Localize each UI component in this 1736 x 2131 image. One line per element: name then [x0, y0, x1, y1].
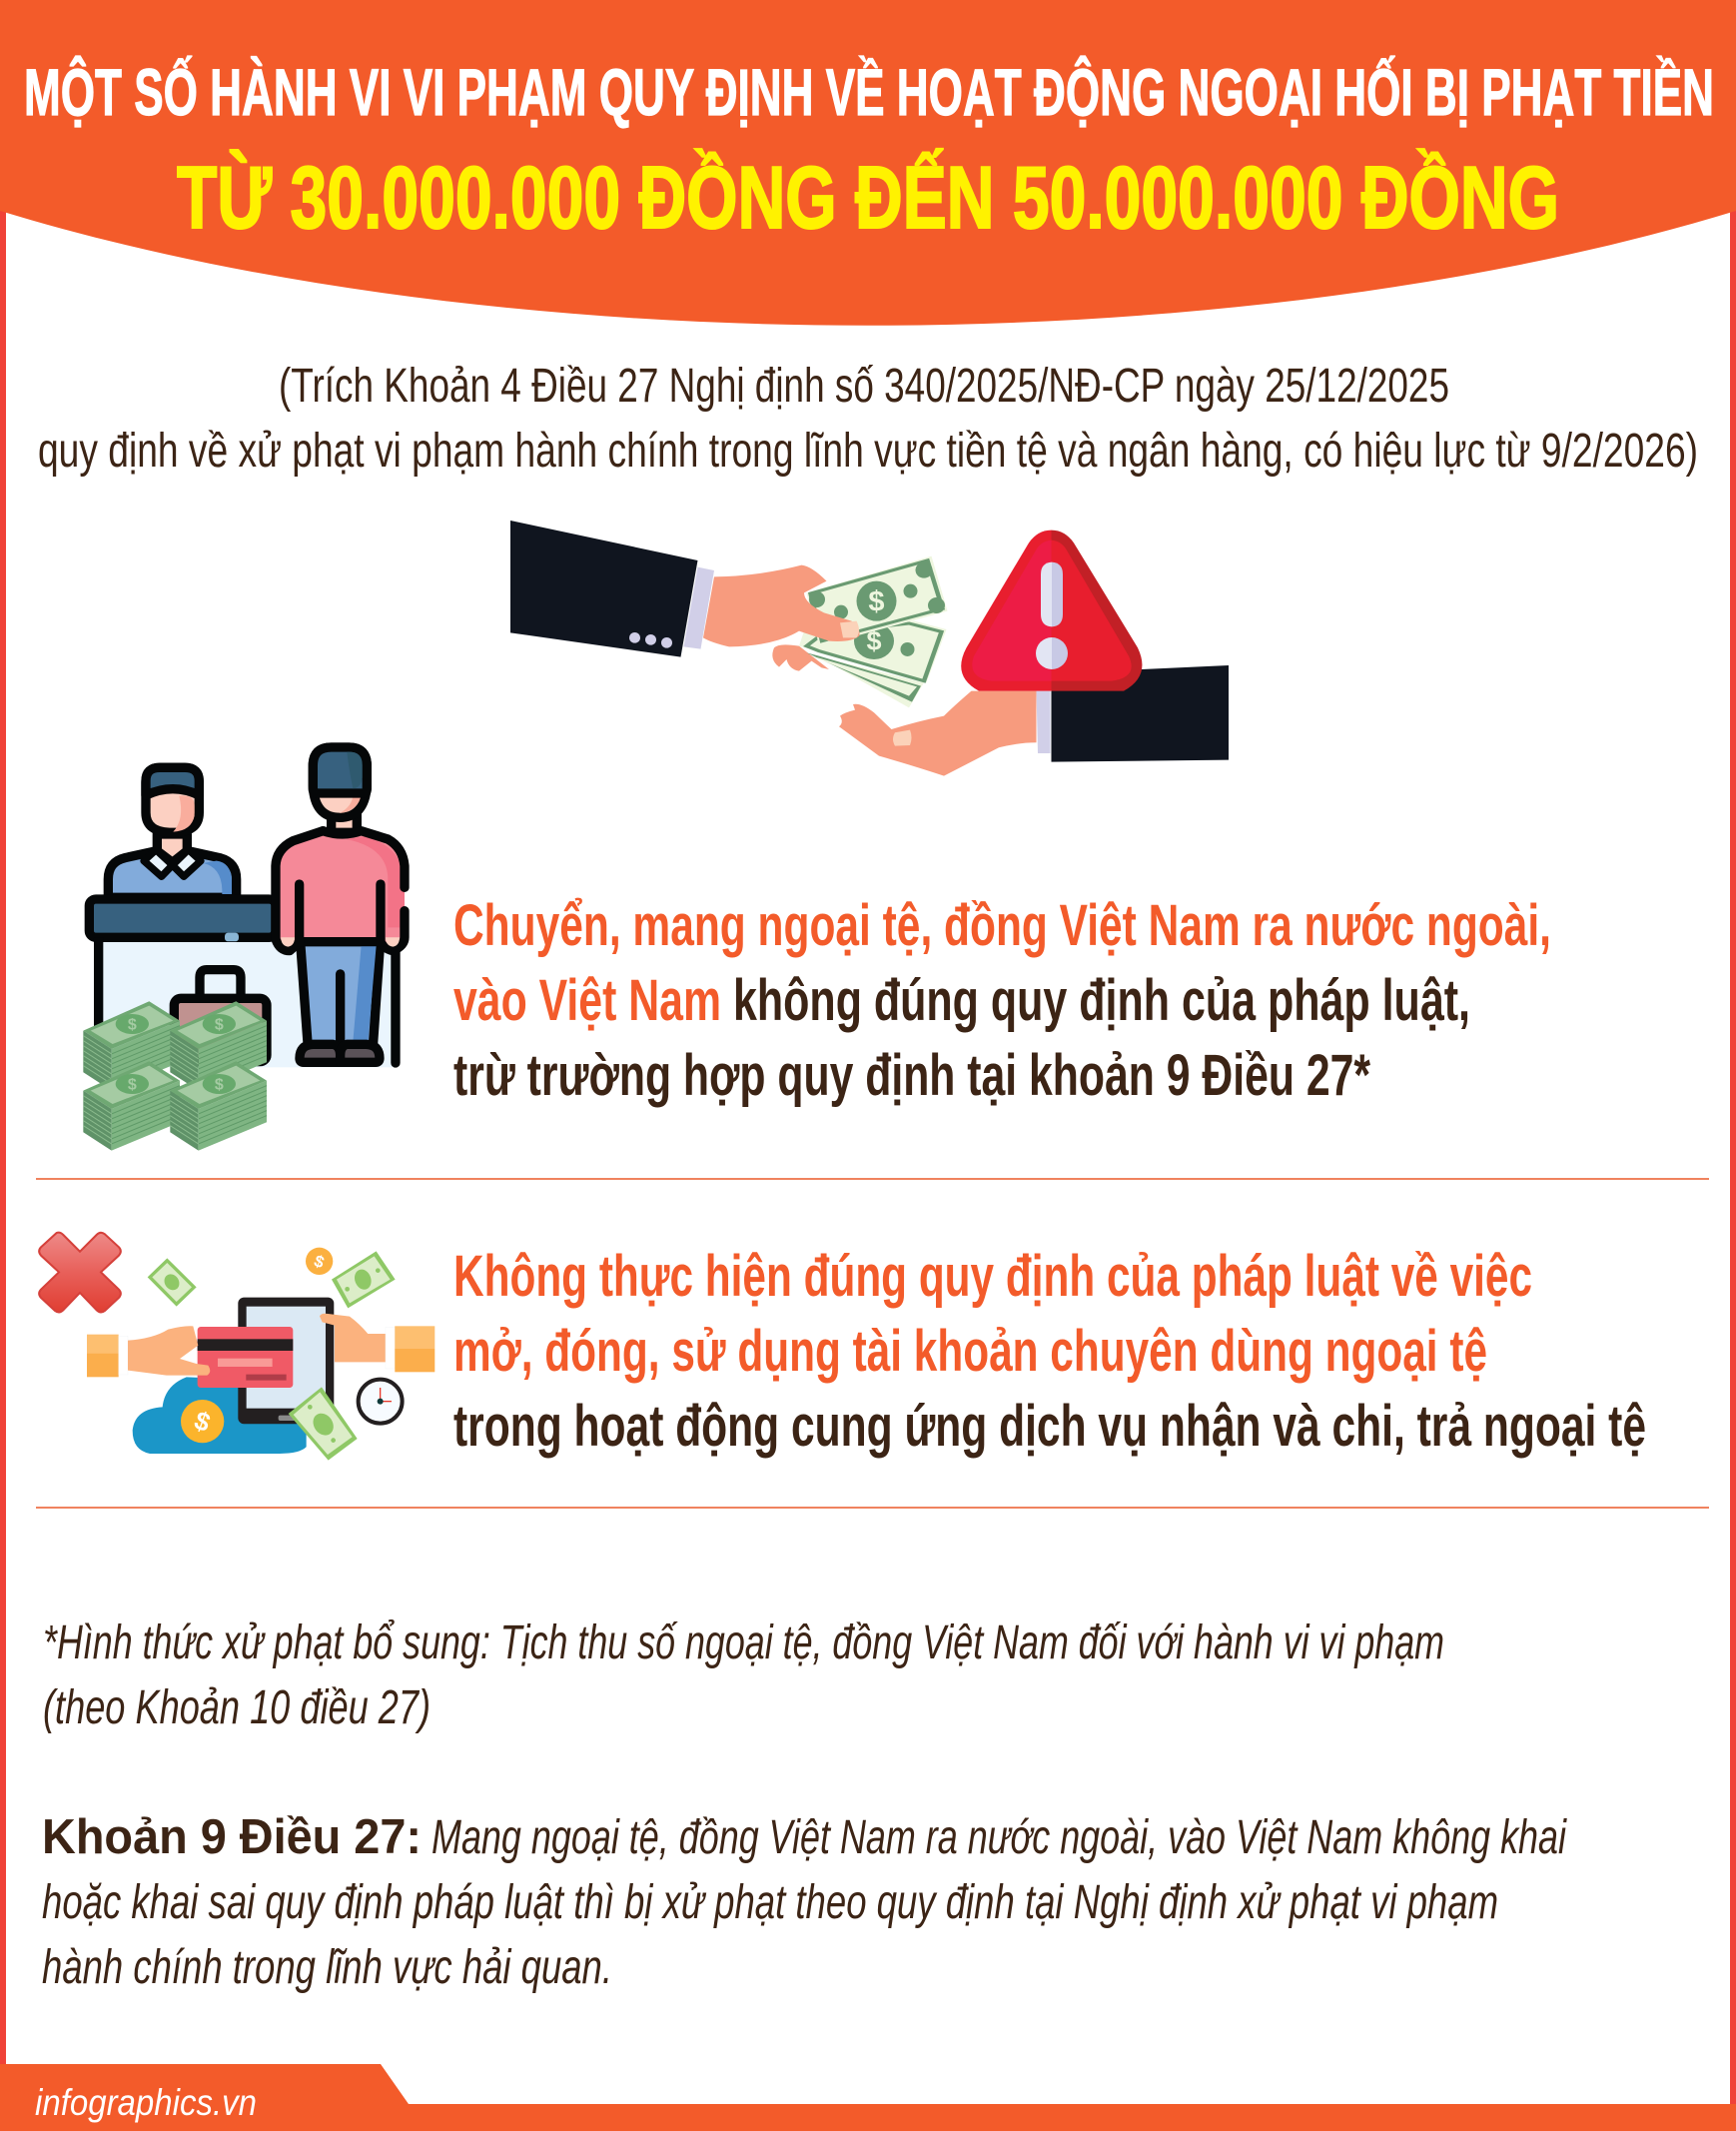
footnote: clause 9 article 27: Khoản 9 Điều 27:: [42, 1810, 422, 1864]
warning right sleeve: [1037, 665, 1229, 762]
money stacks: $: [128, 1077, 137, 1094]
left hand back fingers: [772, 644, 829, 671]
banknotes: [799, 556, 947, 707]
counter front: [99, 939, 394, 1067]
money stacks: $: [215, 1017, 224, 1034]
orange coin: $: [312, 1251, 328, 1273]
money stacks: $: [215, 1077, 224, 1094]
section 1 text: vào Việt Nam: [453, 968, 721, 1033]
counter top: [89, 899, 276, 937]
section 1 text: trừ trường hợp quy định tại khoản 9 Điều 27*: [453, 1043, 1370, 1108]
counter left leg: [94, 937, 103, 1027]
illustration: hands exchanging money with warning sign: [510, 521, 1229, 776]
small banknote: [148, 1258, 197, 1307]
orange coin: [306, 1248, 333, 1275]
clock: [359, 1380, 403, 1424]
left hand and card: [87, 1326, 293, 1388]
icon: red cross: [39, 1233, 121, 1313]
section 1 text: không đúng quy định của pháp luật,: [733, 968, 1470, 1033]
banknotes: $: [868, 586, 885, 618]
tablet: [238, 1298, 334, 1424]
lower hand: [839, 691, 1037, 776]
left hand: [703, 565, 859, 646]
footnote: additional penalty: (theo Khoản 10 điều 27): [43, 1681, 431, 1734]
warning triangle: [961, 531, 1142, 691]
legal source text: [38, 360, 1698, 478]
clerk: [108, 767, 237, 897]
banknotes: $: [866, 626, 882, 656]
footnote: clause 9 article 27: [42, 1810, 1567, 1994]
footer brand: infographics.vn: [35, 2082, 257, 2123]
luggage: [174, 970, 267, 1062]
footnote: clause 9 article 27: hành chính trong lĩnh vực hải quan.: [42, 1941, 612, 1994]
money stacks: [83, 1001, 267, 1151]
gold coin: $: [191, 1405, 215, 1438]
footnote: additional penalty: [43, 1616, 1444, 1734]
money stacks: $: [128, 1017, 137, 1034]
left sleeve: [510, 521, 714, 657]
gap highlight: [225, 933, 239, 941]
lower banknote: [289, 1387, 358, 1461]
cloud: [133, 1377, 307, 1454]
divider 2: [36, 1507, 1709, 1509]
traveller: [276, 747, 405, 1063]
illustration: card payment and tablet: [39, 1233, 434, 1461]
section 2 text: [453, 1244, 1646, 1459]
divider 1: [36, 1178, 1709, 1180]
section 1 text: [453, 893, 1551, 1108]
right hand: [320, 1314, 434, 1372]
upper banknote: [332, 1251, 396, 1308]
illustration: customs counter with money: [83, 747, 405, 1151]
footer band: [0, 2064, 1736, 2131]
gold coin: [181, 1400, 224, 1443]
header banner: [0, 0, 1736, 326]
